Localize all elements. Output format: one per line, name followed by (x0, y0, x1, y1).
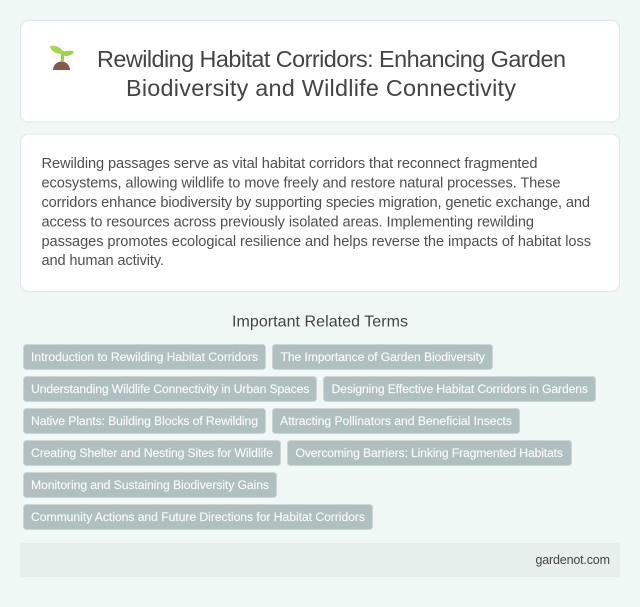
title line 2: Biodiversity and Wildlife Connectivity (126, 75, 516, 101)
footer bar (20, 543, 620, 577)
tag: introduction (24, 344, 266, 370)
tag: designing corridors (324, 376, 596, 402)
tag: garden biodiversity (272, 344, 492, 370)
tag: garden biodiversity: The Importance of Garden Biodiversity (280, 350, 486, 364)
tag: shelter and nesting: Creating Shelter and Nesting Sites for Wildlife (31, 446, 273, 460)
description line 6: and human activity. (42, 253, 164, 269)
tag: native plants: Native Plants: Building Blocks of Rewilding (31, 414, 258, 428)
tag: native plants (24, 408, 266, 434)
tag: wildlife connectivity (24, 376, 316, 402)
tag: monitoring (24, 472, 276, 498)
footer site name: gardenot.com (536, 553, 610, 567)
tag: pollinators (272, 408, 520, 434)
tag: community actions: Community Actions and Future Directions for Habitat Corridors (31, 510, 365, 524)
panel: related term tags (24, 344, 596, 530)
description line 3: corridors enhance biodiversity by supporting species migration, genetic exchange, and (42, 195, 590, 211)
tag: overcoming barriers: Overcoming Barriers: Linking Fragmented Habitats (296, 446, 563, 460)
stem (61, 51, 64, 62)
tag: shelter and nesting (24, 440, 280, 466)
description line 1: Rewilding passages serve as vital habitat corridors that reconnect fragmented (42, 156, 538, 172)
left leaf (50, 46, 64, 54)
footer (20, 543, 620, 577)
right leaf (60, 51, 74, 56)
heading: important related terms: Important Related Terms (232, 314, 408, 330)
title (97, 46, 566, 101)
description card background (20, 134, 620, 292)
description line 4: access to resources across previously isolated areas. Implementing rewilding (42, 214, 534, 230)
title card background (20, 20, 620, 122)
panel: title card (20, 20, 620, 122)
tag: community actions (24, 504, 372, 530)
icon: sprout (50, 46, 74, 70)
description line 2: ecosystems, allowing wildlife to move freely and restore natural processes. These (42, 176, 560, 192)
description text (42, 156, 591, 269)
tag: wildlife connectivity: Understanding Wildlife Connectivity in Urban Spaces (31, 382, 310, 396)
soil mound (53, 62, 70, 70)
tag: overcoming barriers (288, 440, 572, 466)
title line 1: Rewilding Habitat Corridors: Enhancing Garden (97, 46, 566, 72)
tag: pollinators: Attracting Pollinators and Beneficial Insects (280, 414, 512, 428)
tag: monitoring: Monitoring and Sustaining Biodiversity Gains (31, 478, 269, 492)
panel: description card (20, 134, 620, 292)
tag: designing corridors: Designing Effective Habitat Corridors in Gardens (332, 382, 588, 396)
tag: introduction: Introduction to Rewilding Habitat Corridors (31, 350, 258, 364)
description line 5: passages promotes ecological resilience and helps reverse the impacts of habitat loss (42, 234, 591, 250)
